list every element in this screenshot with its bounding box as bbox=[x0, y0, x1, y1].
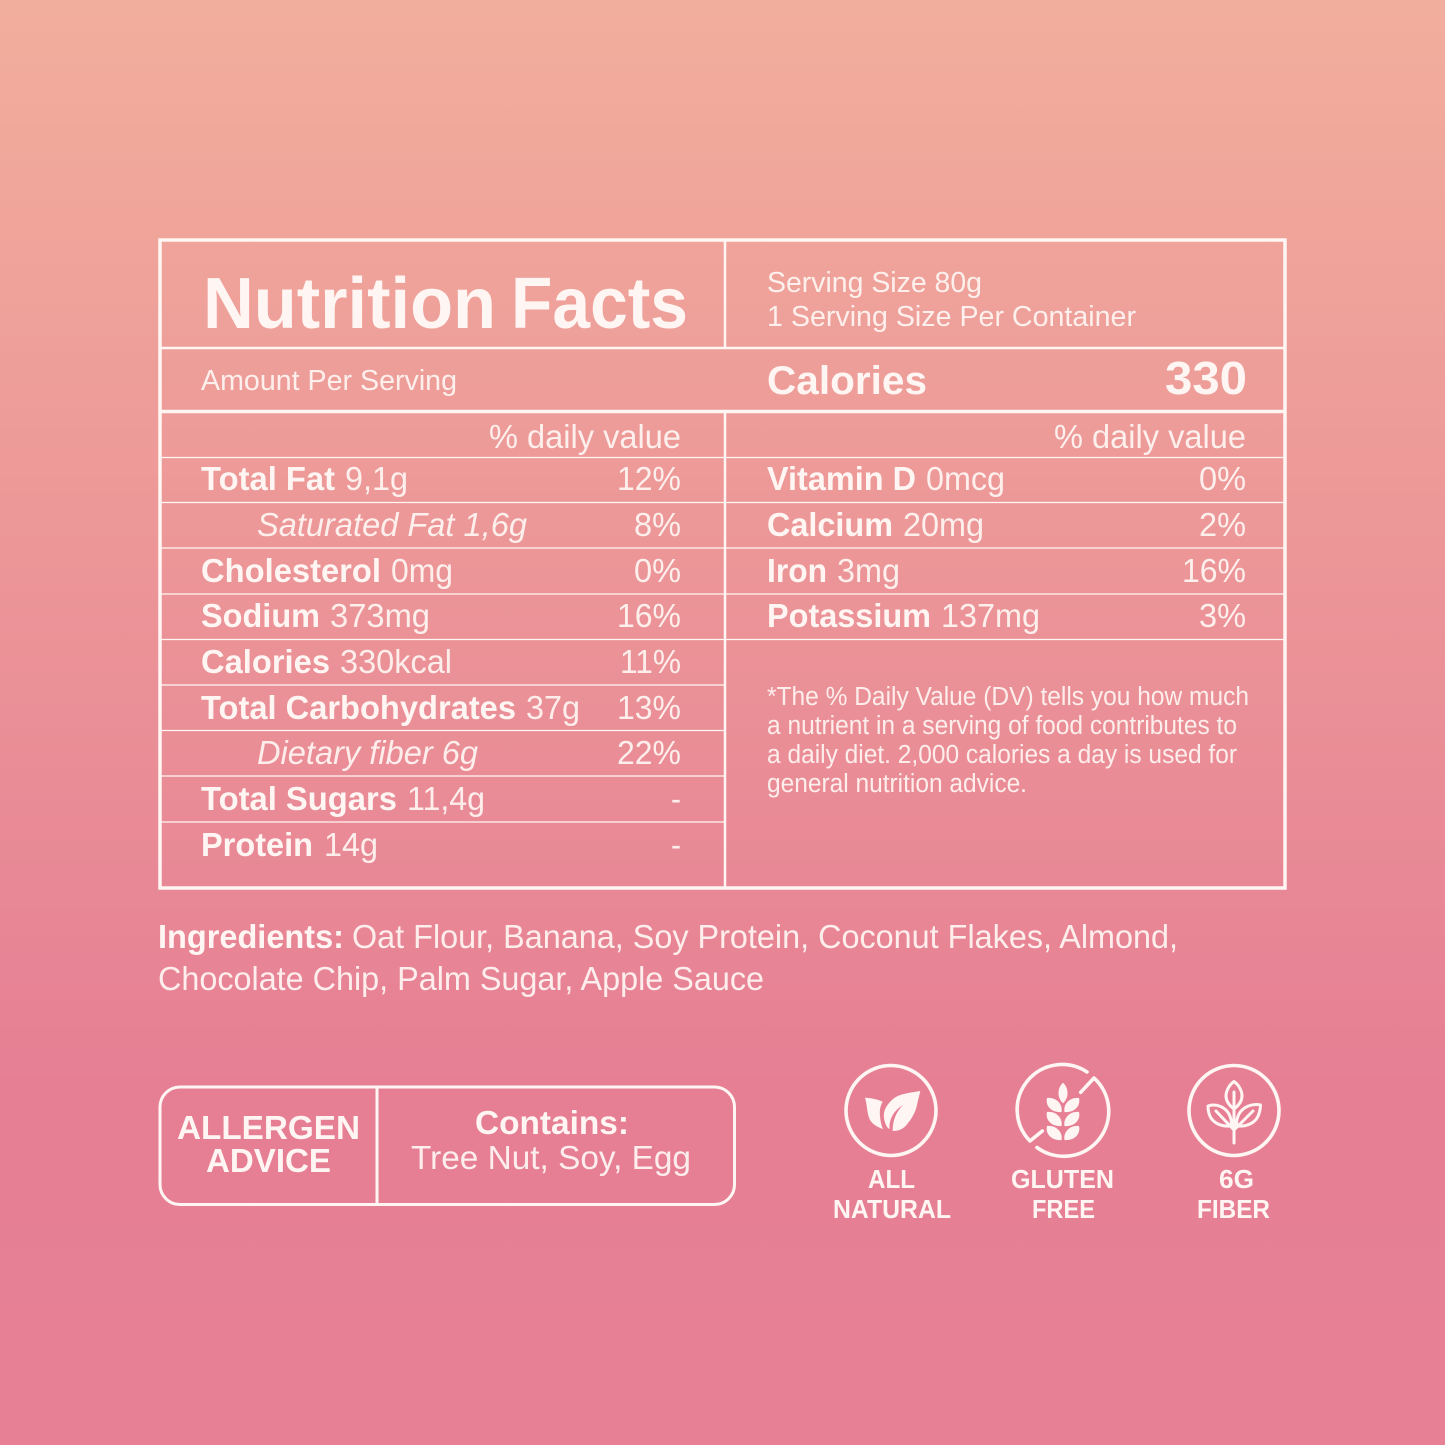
ingredients bbox=[158, 918, 1178, 997]
allergen contents: Tree Nut, Soy, Egg bbox=[411, 1139, 691, 1176]
row: sodium bbox=[201, 597, 681, 634]
row: iron: Iron bbox=[767, 552, 827, 589]
allergen box bbox=[160, 1087, 734, 1205]
footnote: *The % Daily Value (DV) tells you how much bbox=[767, 683, 1249, 711]
ingredients: Ingredients: bbox=[158, 918, 344, 955]
label: 6g fiber: FIBER bbox=[1197, 1194, 1270, 1224]
row: calcium bbox=[767, 506, 1246, 543]
row: calcium: 2% bbox=[1199, 506, 1246, 543]
row: total sugars: 11,4g bbox=[407, 780, 485, 817]
label: 6g fiber bbox=[1197, 1164, 1270, 1224]
daily value headers: % daily value bbox=[489, 418, 681, 455]
calories: Calories bbox=[767, 359, 927, 403]
row: potassium: 3% bbox=[1199, 597, 1246, 634]
row: saturated fat: 8% bbox=[634, 506, 681, 543]
table frame and rules bbox=[160, 240, 1285, 888]
row: protein: 14g bbox=[324, 826, 378, 863]
icon: sprout bbox=[1189, 1066, 1279, 1156]
right nutrient rows bbox=[767, 460, 1246, 634]
panel: nutrition facts table bbox=[160, 240, 1285, 888]
row: potassium: 137mg bbox=[941, 597, 1040, 634]
title bbox=[203, 264, 688, 344]
row: potassium bbox=[767, 597, 1246, 634]
badge: gluten free bbox=[1011, 1065, 1114, 1224]
label: gluten free: FREE bbox=[1032, 1194, 1095, 1224]
row: calcium: 20mg bbox=[903, 506, 984, 543]
row: total carbohydrates: Total Carbohydrates bbox=[201, 689, 516, 726]
label: all natural bbox=[833, 1164, 951, 1224]
row: cholesterol bbox=[201, 552, 681, 589]
row: calcium: Calcium bbox=[767, 506, 893, 543]
row: calories bbox=[201, 643, 681, 680]
row: iron bbox=[767, 552, 1246, 589]
row: protein bbox=[201, 826, 681, 863]
amount per serving: Amount Per Serving bbox=[201, 365, 457, 397]
title: Nutrition bbox=[203, 264, 496, 344]
row: total fat: 12% bbox=[617, 460, 681, 497]
footnote: a daily diet. 2,000 calories a day is used for bbox=[767, 741, 1237, 769]
row: saturated fat: Saturated Fat 1,6g bbox=[257, 506, 528, 543]
row: calories: Calories bbox=[201, 643, 330, 680]
row: potassium: Potassium bbox=[767, 597, 931, 634]
row: vitamin d: Vitamin D bbox=[767, 460, 916, 497]
panel: allergen advice bbox=[160, 1087, 734, 1205]
label: all natural: ALL bbox=[868, 1164, 915, 1194]
title: Facts bbox=[511, 264, 688, 344]
row: sodium: 373mg bbox=[330, 597, 430, 634]
allergen heading bbox=[177, 1109, 360, 1179]
row: iron: 3mg bbox=[837, 552, 900, 589]
row: cholesterol: 0mg bbox=[391, 552, 453, 589]
row: total sugars: - bbox=[671, 780, 681, 817]
serving size bbox=[767, 267, 1136, 333]
calories: 330 bbox=[1165, 352, 1247, 404]
allergen heading: ALLERGEN bbox=[177, 1109, 360, 1146]
label: gluten free: GLUTEN bbox=[1011, 1164, 1114, 1194]
row: vitamin d bbox=[767, 460, 1246, 497]
daily value headers: % daily value bbox=[1054, 418, 1246, 455]
label: all natural: NATURAL bbox=[833, 1194, 951, 1224]
row: cholesterol: 0% bbox=[634, 552, 681, 589]
row: total sugars: Total Sugars bbox=[201, 780, 397, 817]
row: total fat: Total Fat bbox=[201, 460, 335, 497]
row: dietary fiber: 22% bbox=[617, 734, 681, 771]
row: total carbohydrates: 37g bbox=[526, 689, 580, 726]
serving size: Serving Size 80g bbox=[767, 267, 982, 299]
row: cholesterol: Cholesterol bbox=[201, 552, 381, 589]
icon: crossed wheat bbox=[1017, 1065, 1109, 1156]
icon: leaves bbox=[846, 1066, 936, 1156]
ingredients: Oat Flour, Banana, Soy Protein, Coconut Flakes, Almond, bbox=[352, 918, 1178, 955]
left nutrient rows bbox=[201, 460, 681, 863]
label: gluten free bbox=[1011, 1164, 1114, 1224]
row: total fat: 9,1g bbox=[345, 460, 408, 497]
badge: 6g fiber bbox=[1189, 1066, 1279, 1224]
row: dietary fiber: Dietary fiber 6g bbox=[257, 734, 479, 771]
row: iron: 16% bbox=[1182, 552, 1246, 589]
footnote: a nutrient in a serving of food contributes to bbox=[767, 712, 1237, 740]
row: total carbohydrates: 13% bbox=[617, 689, 681, 726]
row: vitamin d: 0mcg bbox=[926, 460, 1005, 497]
row: total sugars bbox=[201, 780, 681, 817]
daily value headers bbox=[489, 418, 1246, 455]
row: calories: 330kcal bbox=[340, 643, 452, 680]
allergen contents: Contains: bbox=[475, 1104, 629, 1141]
footnote bbox=[767, 683, 1249, 798]
serving size: 1 Serving Size Per Container bbox=[767, 301, 1136, 333]
footnote: general nutrition advice. bbox=[767, 770, 1027, 798]
row: protein: - bbox=[671, 826, 681, 863]
row: calories: 11% bbox=[620, 643, 681, 680]
row: protein: Protein bbox=[201, 826, 313, 863]
allergen heading: ADVICE bbox=[206, 1142, 331, 1179]
row: dietary fiber bbox=[257, 734, 681, 771]
label: 6g fiber: 6G bbox=[1219, 1164, 1254, 1194]
row: sodium: Sodium bbox=[201, 597, 320, 634]
badge: all natural bbox=[833, 1066, 951, 1224]
calories bbox=[767, 352, 1247, 404]
row: sodium: 16% bbox=[617, 597, 681, 634]
row: total fat bbox=[201, 460, 681, 497]
allergen contents bbox=[411, 1104, 691, 1176]
row: saturated fat bbox=[257, 506, 681, 543]
ingredients: Chocolate Chip, Palm Sugar, Apple Sauce bbox=[158, 960, 764, 997]
row: total carbohydrates bbox=[201, 689, 681, 726]
row: vitamin d: 0% bbox=[1199, 460, 1246, 497]
